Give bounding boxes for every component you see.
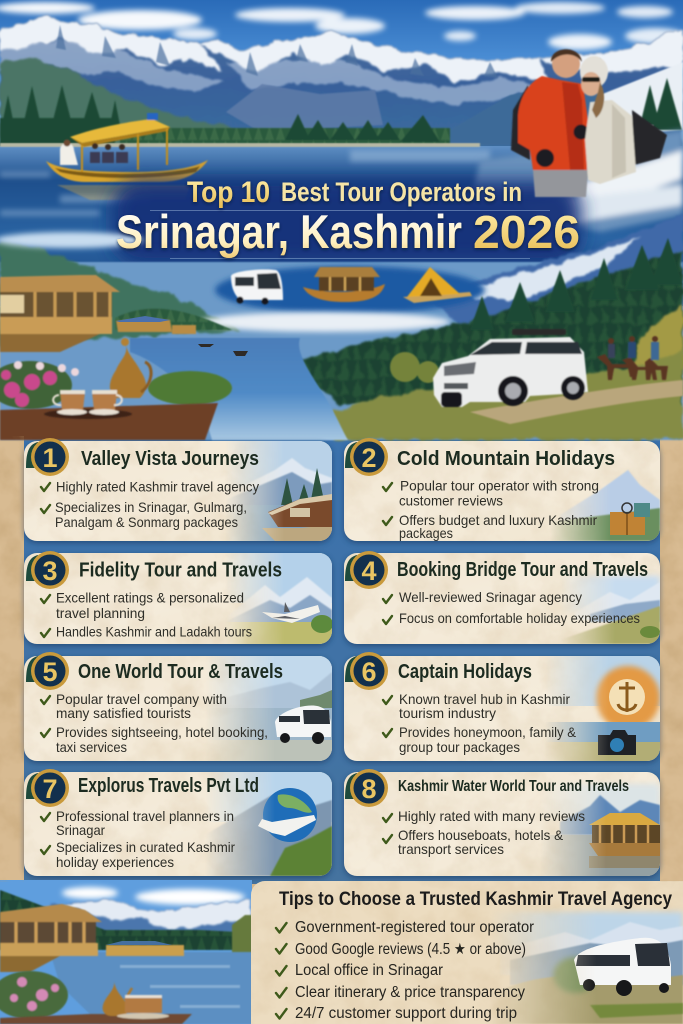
card 8 heading: Kashmir Water World Tour and Travels — [398, 778, 629, 795]
horse riders — [597, 336, 668, 380]
card 2 points: customer reviews — [399, 492, 503, 508]
card 1 heading: Valley Vista Journeys — [81, 448, 259, 470]
card 1 points: Specializes in Srinagar, Gulmarg, — [55, 499, 247, 515]
paper fills — [24, 441, 683, 1024]
card 7 — [26, 769, 332, 876]
badge 1 — [26, 438, 69, 476]
card 2 points — [383, 478, 599, 541]
badge 7: 7 — [42, 774, 58, 804]
woman's hat and head — [580, 56, 608, 88]
badge 4 — [345, 551, 388, 589]
card 6 scenery — [545, 656, 660, 761]
river — [130, 338, 348, 440]
badge 7 — [26, 769, 69, 807]
badge 8 — [345, 769, 388, 807]
badge 2 — [345, 438, 388, 476]
badge 5: 5 — [42, 657, 58, 687]
bottom left lake scene — [0, 880, 252, 1024]
card 4 points: Focus on comfortable holiday experiences — [399, 610, 640, 626]
card 2 points: packages — [399, 525, 453, 541]
card 3 points: Excellent ratings & personalized — [56, 590, 244, 606]
small boats — [198, 344, 248, 356]
mountain range — [0, 16, 683, 150]
tips checklist: Good Google reviews (4.5 ★ or above) — [295, 941, 526, 958]
snowy peaks — [50, 900, 250, 945]
card 6 points: Known travel hub in Kashmir — [399, 691, 570, 707]
card 2 points: Offers budget and luxury Kashmir — [399, 512, 597, 528]
wheels — [498, 376, 528, 406]
card 7 points: Professional travel planners in — [56, 808, 234, 824]
badge 2: 2 — [361, 443, 377, 473]
tips checklist: Local office in Srinagar — [295, 962, 443, 979]
couple of travellers — [511, 49, 667, 197]
left mid forest — [115, 309, 232, 330]
white mist — [200, 312, 450, 332]
lake highlights — [0, 150, 490, 244]
card 8 points — [383, 808, 585, 857]
card 7 points: holiday experiences — [56, 854, 174, 870]
snow caps — [0, 16, 683, 82]
card 1 points: Highly rated Kashmir travel agency — [56, 478, 259, 494]
houseboat — [0, 904, 102, 972]
tea set — [44, 338, 151, 419]
card 2 heading: Cold Mountain Holidays — [397, 448, 615, 470]
backpacks — [511, 85, 667, 165]
card 8 points: Highly rated with many reviews — [398, 808, 585, 824]
title text: Best Tour Operators in — [281, 177, 522, 207]
margin parchment mottling — [0, 436, 683, 884]
right pine forest — [288, 250, 683, 405]
card 7 scenery — [205, 772, 332, 876]
gloves — [536, 149, 554, 167]
badge 1: 1 — [42, 443, 58, 473]
distant houseboat — [116, 318, 196, 334]
title band — [112, 180, 582, 264]
SUV — [433, 329, 588, 407]
card 8 scenery — [540, 784, 660, 876]
card 5 heading: One World Tour & Travels — [78, 661, 283, 683]
card 3 scenery — [225, 553, 333, 644]
card 8 — [345, 769, 660, 876]
distant houseboat — [106, 945, 184, 956]
card 7 points: Specializes in curated Kashmir — [56, 839, 235, 855]
icon: bus — [231, 269, 283, 304]
card 1 scenery — [225, 441, 332, 541]
water ripples — [120, 965, 240, 1008]
card 6 heading: Captain Holidays — [398, 661, 532, 683]
flowers — [0, 971, 68, 1019]
snow slope behind couple — [600, 62, 683, 135]
title text: 2026 — [473, 206, 580, 258]
card 2 scenery — [550, 470, 660, 541]
card 7 points — [41, 808, 235, 870]
lower snow wash — [0, 40, 548, 104]
title text — [116, 176, 580, 258]
icon: tent — [403, 267, 472, 303]
snowy right ridge — [430, 214, 683, 335]
sunlit slope — [630, 306, 683, 372]
water — [50, 952, 252, 1024]
man's head — [552, 50, 580, 78]
snowy foreground behind couple — [470, 130, 683, 232]
far shoreline — [0, 143, 480, 147]
left green slope — [0, 59, 240, 150]
card 3 points: travel planning — [56, 605, 145, 621]
windows — [470, 342, 582, 355]
autumn bushes — [390, 352, 439, 383]
card 5 points: Provides sightseeing, hotel booking, — [56, 724, 268, 740]
clouds — [62, 887, 245, 905]
card 3 points — [41, 590, 252, 640]
stone table — [0, 403, 218, 440]
card 5 points: many satisfied tourists — [56, 705, 191, 721]
meadow — [335, 350, 683, 440]
forest treetops — [470, 238, 683, 330]
card 8 points: transport services — [398, 841, 504, 857]
badge 5 — [26, 652, 69, 690]
dirt track — [470, 380, 683, 424]
card 4 points: Well-reviewed Srinagar agency — [399, 589, 582, 605]
tree lines — [0, 78, 682, 145]
card 5 — [26, 652, 332, 761]
flowers and bush beside table — [0, 361, 232, 409]
shikara boat — [46, 113, 208, 200]
card 1 points — [41, 478, 259, 530]
rock streaks in snow — [56, 25, 606, 78]
central ridge — [226, 84, 383, 132]
card paper mottling — [0, 436, 683, 1024]
card 4 — [345, 551, 660, 644]
card 6 points: tourism industry — [399, 705, 496, 721]
card 5 points — [41, 691, 268, 755]
card 6 points: Provides honeymoon, family & — [399, 724, 577, 740]
mid blue band behind icons — [215, 266, 485, 314]
icon: houseboat — [303, 267, 385, 302]
card 1 — [26, 438, 332, 541]
card 8 points: Offers houseboats, hotels & — [398, 827, 564, 843]
card 6 points: group tour packages — [399, 739, 520, 755]
clouds — [0, 2, 683, 50]
left green hills — [0, 240, 240, 345]
card 3 points: Handles Kashmir and Ladakh tours — [56, 624, 252, 640]
tips scenery — [490, 912, 683, 1024]
badge 6 — [345, 652, 388, 690]
man's jacket and legs — [533, 170, 588, 197]
card 7 heading: Explorus Travels Pvt Ltd — [78, 775, 259, 797]
badge 3: 3 — [42, 556, 58, 586]
title text: Top 10 — [187, 176, 270, 209]
badge 6: 6 — [361, 657, 377, 687]
card 4 points — [383, 589, 640, 626]
grille — [444, 362, 476, 376]
card 1 points: Panalgam & Sonmarg packages — [55, 514, 238, 530]
van icon — [574, 938, 671, 985]
card 5 scenery — [205, 656, 332, 761]
card 3 heading: Fidelity Tour and Travels — [79, 560, 282, 582]
card 5 points: taxi services — [56, 739, 127, 755]
hero scene: mountains and lake — [0, 0, 683, 306]
woman's jacket — [585, 100, 636, 184]
card 6 points — [383, 691, 577, 755]
tips checklist — [276, 919, 534, 1022]
card 6 — [345, 652, 660, 761]
forest — [0, 890, 238, 950]
tips checklist: Clear itinerary & price transparency — [295, 984, 525, 1001]
card 7 points: Srinagar — [56, 822, 105, 838]
card 2 points: Popular tour operator with strong — [400, 478, 599, 494]
card 2 — [345, 438, 660, 541]
mist over left hills — [0, 232, 145, 248]
card 3 — [26, 551, 333, 644]
badge 8: 8 — [361, 774, 377, 804]
card 4 scenery — [560, 576, 660, 644]
card 5 points: Popular travel company with — [56, 691, 227, 707]
lake — [0, 146, 683, 306]
tips checklist: Government-registered tour operator — [295, 919, 534, 936]
right ridge — [445, 85, 640, 145]
parchment background — [0, 436, 683, 884]
boat passengers — [60, 143, 78, 165]
tea set and table — [0, 980, 192, 1024]
title text: Srinagar, Kashmir — [116, 205, 462, 258]
lower scene background — [0, 214, 683, 440]
card shadows — [24, 443, 660, 878]
badge 4: 4 — [361, 556, 377, 586]
tips panel — [276, 888, 683, 1024]
tips checklist: 24/7 customer support during trip — [295, 1005, 517, 1022]
left houseboat — [0, 275, 120, 352]
badge 3 — [26, 551, 69, 589]
